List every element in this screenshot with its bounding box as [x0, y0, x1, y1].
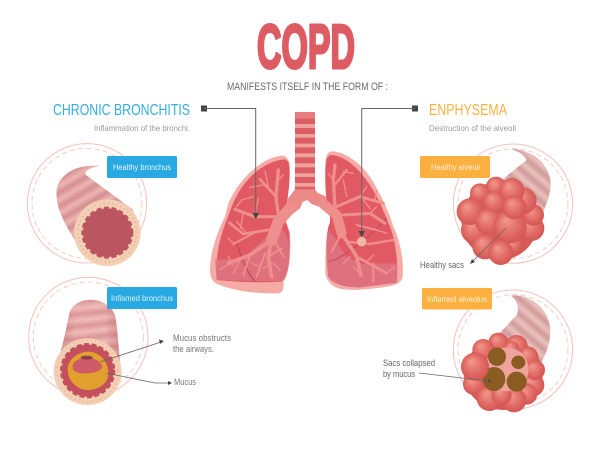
label: inflamed bronchus [107, 287, 177, 309]
alveoli cluster [457, 177, 544, 265]
ring [29, 277, 148, 397]
lung outer shape left [210, 156, 290, 293]
panel: inflamed alveolus [453, 290, 573, 412]
heading: enphysema: ENPHYSEMA [429, 102, 507, 119]
bronchial tree left [220, 170, 290, 277]
label: inflamed alveolus: Inflamed alveolus [427, 294, 487, 304]
heading: chronic bronchitis: CHRONIC BRONCHITIS [53, 102, 190, 119]
label: healthy bronchus [107, 156, 177, 178]
label: inflamed bronchus: Inflamed bronchus [111, 293, 173, 303]
callout: mucus obstructs: Mucus obstructs [173, 333, 231, 343]
label: inflamed alveolus [422, 288, 492, 310]
lung inner left [216, 159, 290, 282]
label: healthy bronchus: Healthy bronchus [113, 162, 171, 172]
damaged spot [357, 237, 367, 247]
callout: healthy sacs: Healthy sacs [420, 260, 464, 270]
lungs [210, 112, 403, 293]
ring [27, 144, 147, 263]
arrow: left connector [201, 106, 259, 219]
bronchial tree right [323, 165, 395, 282]
trachea [295, 112, 315, 192]
tube [57, 300, 121, 370]
panel: healthy bronchus [27, 144, 147, 266]
callout: mucus obstructs: the airways. [173, 344, 214, 354]
cross-section [54, 338, 122, 405]
arrow: right connector [358, 106, 418, 237]
subtitle: MANIFESTS ITSELF IN THE FORM OF : [227, 81, 388, 93]
label: healthy alveoli: Healthy alveoli [431, 162, 480, 172]
label: healthy alveoli [420, 156, 490, 178]
callout: mucus obstructs [100, 333, 231, 362]
alveoli cluster [463, 333, 545, 412]
heading: enphysema: Destruction of the alveoli [429, 123, 516, 133]
main bronchi [286, 189, 327, 219]
lung inner right [326, 155, 397, 287]
callout: sacs collapsed [383, 358, 488, 381]
callout: mucus: Mucus [174, 377, 196, 387]
ring [453, 144, 573, 263]
title: COPD [257, 13, 355, 82]
lower lobes [215, 229, 289, 282]
fissures [237, 243, 255, 282]
tube [490, 295, 550, 365]
tube [502, 149, 551, 215]
panel: inflamed bronchus [29, 277, 148, 405]
callout: healthy sacs [420, 228, 506, 270]
heading: chronic bronchitis: Inflammation of the bronchi. [94, 123, 190, 133]
callout: mucus [106, 373, 196, 387]
cross-section [74, 199, 141, 266]
mucus-filled sacs [483, 347, 529, 392]
callout: sacs collapsed: by mucus [383, 369, 415, 379]
ring [453, 290, 573, 409]
panel: healthy alveoli [453, 144, 573, 265]
heading: enphysema [429, 102, 516, 133]
front sac [461, 353, 489, 381]
tube [56, 166, 137, 243]
heading: chronic bronchitis [53, 102, 190, 133]
lung outer shape right [325, 151, 403, 290]
callout: sacs collapsed: Sacs collapsed [383, 358, 435, 368]
